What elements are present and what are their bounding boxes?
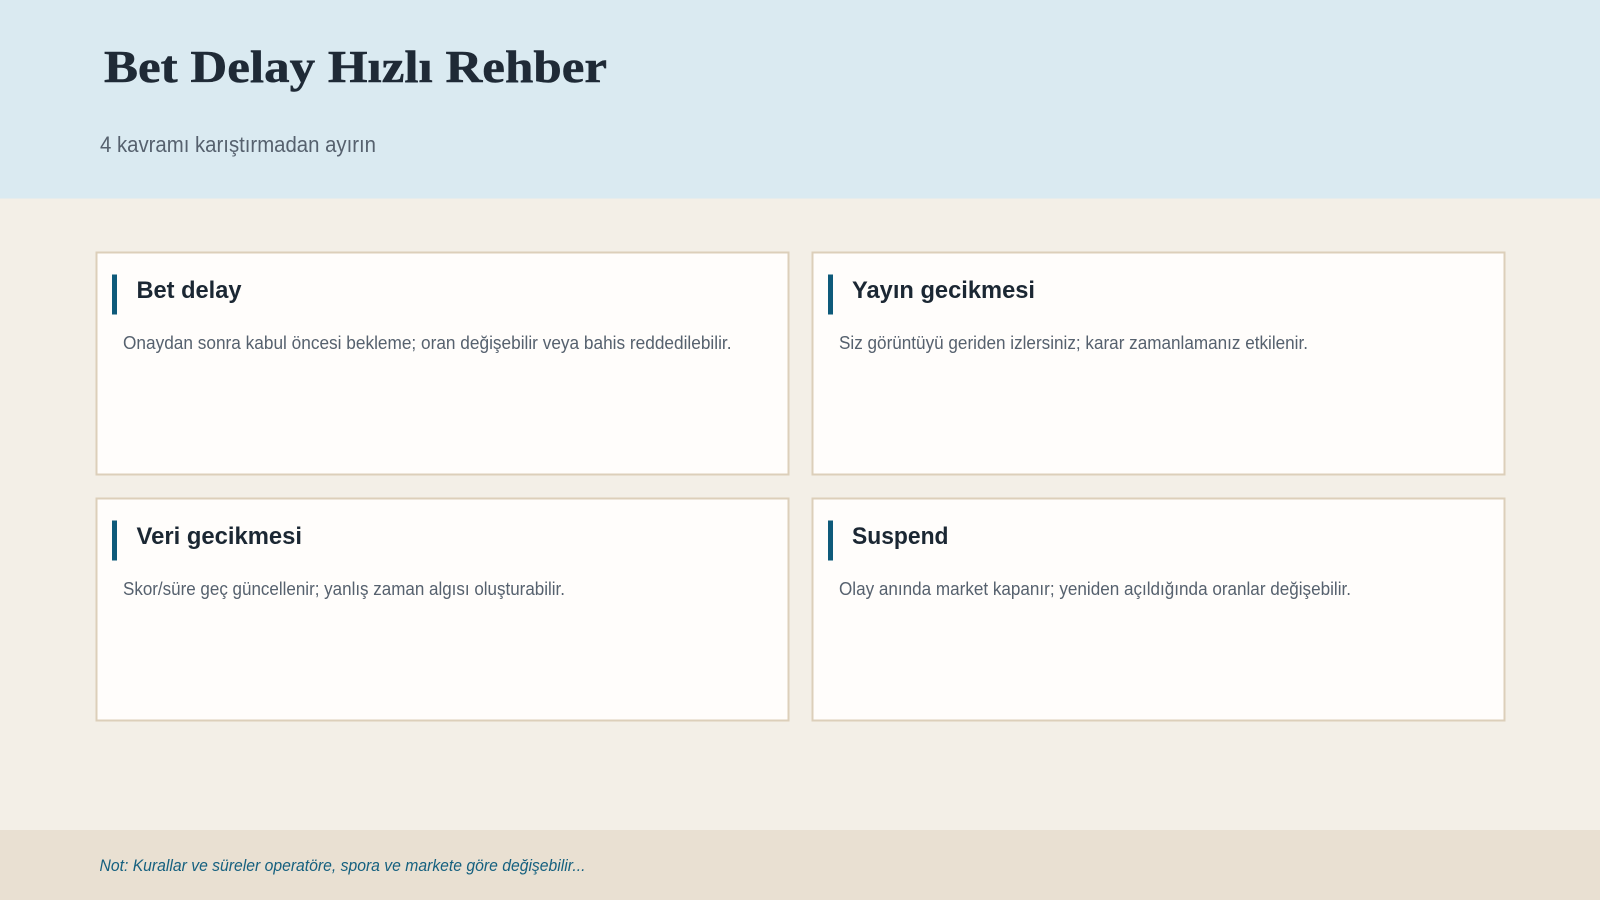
accent bar: [828, 520, 833, 560]
card heading: Suspend: [852, 523, 948, 550]
footer note: Not: Kurallar ve süreler operatöre, spora ve markete göre değişebilir...: [100, 856, 586, 875]
header band: [0, 0, 1600, 198]
card heading: Bet delay: [136, 277, 242, 304]
title: Bet Delay Hızlı Rehber: [104, 41, 607, 92]
panel: Bet delay: [96, 252, 788, 474]
accent bar: [112, 520, 117, 560]
subtitle: 4 kavramı karıştırmadan ayırın: [100, 132, 376, 157]
accent bar: [828, 274, 833, 314]
card heading: Yayın gecikmesi: [852, 277, 1035, 304]
footer band: [0, 830, 1600, 900]
accent bar: [112, 274, 117, 314]
card text: Olay anında market kapanır; yeniden açıldığında oranlar değişebilir.: [839, 579, 1351, 599]
card text: Siz görüntüyü geriden izlersiniz; karar zamanlamanız etkilenir.: [839, 333, 1308, 353]
card text: Onaydan sonra kabul öncesi bekleme; oran değişebilir veya bahis reddedilebilir.: [123, 333, 732, 353]
panel: Veri gecikmesi: [96, 498, 788, 720]
panel: Yayın gecikmesi: [812, 252, 1504, 474]
card text: Skor/süre geç güncellenir; yanlış zaman algısı oluşturabilir.: [123, 579, 565, 599]
panel: Suspend: [812, 498, 1504, 720]
card heading: Veri gecikmesi: [136, 523, 302, 550]
